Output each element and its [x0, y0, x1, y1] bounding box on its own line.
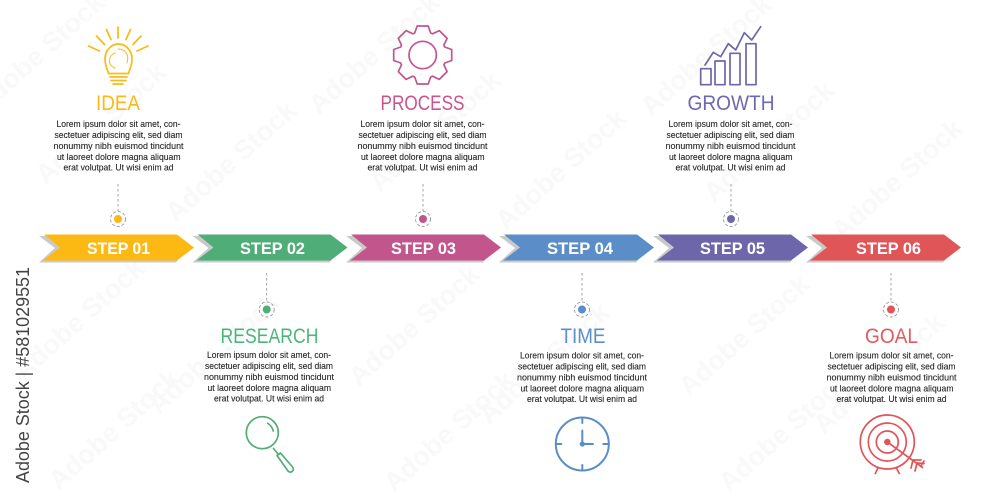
- text: Adobe Stock: [43, 362, 186, 496]
- heading: research: RESEARCH: [220, 325, 318, 348]
- text block: goal: erat volutpat. Ut wisi enim ad: [836, 393, 946, 404]
- text: Adobe Stock: [30, 56, 173, 190]
- text: Adobe Stock: [698, 74, 841, 208]
- panel: growth: [666, 27, 796, 227]
- heading: time: TIME: [560, 325, 606, 348]
- connector marker: research: [259, 273, 274, 317]
- connector marker: growth: [724, 184, 738, 226]
- text block: idea: ut laoreet dolore magna aliquam: [57, 151, 181, 162]
- arrow: step 04: STEP 04: [547, 240, 614, 258]
- text block: process: ut laoreet dolore magna aliquam: [361, 151, 485, 162]
- icon: target with arrow: [860, 415, 924, 474]
- text block: time: nonummy nibh euismod tincidunt: [517, 372, 647, 382]
- text: Adobe Stock: [343, 258, 486, 392]
- arrow: step 06: [806, 234, 961, 262]
- text: Adobe Stock: [713, 364, 856, 498]
- text block: research: nonummy nibh euismod tincidunt: [204, 371, 334, 382]
- connector marker: process: [416, 184, 430, 226]
- text: Adobe Stock: [673, 268, 816, 402]
- connector marker: time: [574, 273, 590, 317]
- heading: process: PROCESS: [380, 92, 464, 115]
- connector marker: goal: [884, 273, 898, 317]
- text block: time: sectetuer adipiscing elit, sed diam: [518, 360, 646, 372]
- panel: process: [358, 26, 488, 226]
- text block: process: [358, 118, 488, 172]
- text block: process: nonummy nibh euismod tincidunt: [358, 140, 488, 151]
- arrow: step 05: [653, 234, 808, 262]
- arrow: step 01: STEP 01: [87, 240, 150, 258]
- arrow: step 01: [39, 234, 194, 262]
- text: Adobe Stock: [808, 306, 951, 440]
- text block: goal: nonummy nibh euismod tincidunt: [826, 372, 957, 382]
- text block: research: Lorem ipsum dolor sit amet, con-: [207, 349, 331, 360]
- text block: research: ut laoreet dolore magna aliquam: [208, 382, 331, 393]
- text: Adobe Stock: [8, 252, 151, 386]
- arrow: step 02: [192, 234, 348, 262]
- icon: light bulb: [88, 27, 148, 84]
- text block: growth: Lorem ipsum dolor sit amet, con-: [668, 118, 792, 129]
- text block: goal: Lorem ipsum dolor sit amet, con-: [830, 350, 954, 360]
- text block: goal: sectetuer adipiscing elit, sed diam: [828, 360, 956, 372]
- connector marker: idea: [110, 184, 126, 226]
- heading: idea: IDEA: [96, 92, 140, 115]
- arrow: step 03: [346, 234, 501, 262]
- text block: time: [517, 350, 647, 404]
- text block: time: Lorem ipsum dolor sit amet, con-: [520, 350, 644, 360]
- text block: time: ut laoreet dolore magna aliquam: [520, 382, 644, 394]
- text block: time: erat volutpat. Ut wisi enim ad: [527, 393, 637, 404]
- arrow: step 03: STEP 03: [391, 240, 456, 258]
- text block: research: [204, 349, 334, 404]
- icon: bar chart with trend line: [701, 27, 761, 85]
- text block: idea: Lorem ipsum dolor sit amet, con-: [56, 118, 180, 129]
- panel: idea: [54, 27, 184, 226]
- icon: gear: [394, 26, 452, 84]
- text block: idea: nonummy nibh euismod tincidunt: [54, 140, 184, 151]
- arrow: step 04: [499, 234, 654, 262]
- text block: process: sectetuer adipiscing elit, sed diam: [358, 129, 487, 140]
- panel: research: [204, 273, 334, 472]
- arrow: step 02: STEP 02: [240, 240, 305, 258]
- text block: research: sectetuer adipiscing elit, sed diam: [205, 360, 333, 371]
- step arrow band: [39, 234, 961, 262]
- text block: idea: sectetuer adipiscing elit, sed diam: [54, 129, 183, 140]
- text block: growth: erat volutpat. Ut wisi enim ad: [676, 162, 786, 172]
- text block: research: erat volutpat. Ut wisi enim ad: [214, 392, 324, 404]
- icon: clock: [556, 418, 609, 470]
- text block: idea: [54, 118, 184, 172]
- text block: growth: [666, 118, 796, 172]
- arrow: step 06: STEP 06: [856, 240, 921, 258]
- text: Adobe Stock: [160, 94, 303, 228]
- text block: process: erat volutpat. Ut wisi enim ad: [368, 162, 478, 172]
- text block: growth: sectetuer adipiscing elit, sed diam: [666, 129, 795, 140]
- text: Adobe Stock: [473, 296, 616, 430]
- text block: growth: ut laoreet dolore magna aliquam: [669, 151, 793, 162]
- text block: goal: ut laoreet dolore magna aliquam: [830, 382, 954, 394]
- text block: goal: [826, 350, 957, 404]
- text: Adobe Stock: [378, 364, 521, 498]
- text: Adobe Stock: [364, 64, 507, 198]
- text: Adobe Stock: [143, 286, 286, 420]
- text: Adobe Stock: [490, 102, 633, 236]
- heading: growth: GROWTH: [688, 92, 774, 115]
- heading: goal: GOAL: [865, 325, 918, 348]
- stock image side label: Adobe Stock | #581029551: [13, 267, 33, 483]
- text: Adobe Stock: [826, 112, 969, 246]
- arrow: step 05: STEP 05: [700, 240, 765, 258]
- panel: time: [517, 273, 647, 470]
- icon: magnifying glass: [246, 417, 293, 472]
- text block: process: Lorem ipsum dolor sit amet, con-: [360, 118, 484, 129]
- text block: idea: erat volutpat. Ut wisi enim ad: [64, 162, 174, 172]
- text block: growth: nonummy nibh euismod tincidunt: [666, 140, 796, 151]
- panel: goal: [826, 273, 957, 474]
